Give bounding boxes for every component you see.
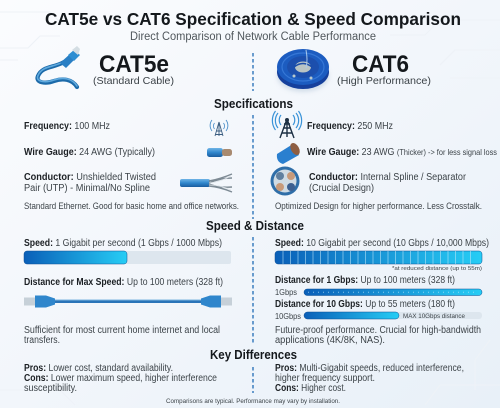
1Gbps bar <box>304 289 482 296</box>
panel: CAT6 speed and distance <box>275 238 489 346</box>
conductor second line: Pair (UTP) - Minimal/No Spline <box>24 183 150 194</box>
reduced distance note: *at reduced distance (up to 55m) <box>392 266 482 272</box>
distance label: Distance for Max Speed: Up to 100 meters (328 ft) <box>24 277 223 288</box>
panel: CAT6 specifications <box>270 111 497 211</box>
cons: Cons: Lower maximum speed, higher interference <box>24 373 217 384</box>
heading: speed and distance: Speed & Distance <box>206 219 304 233</box>
center divider <box>252 53 254 393</box>
panel: CAT6 pros and cons <box>275 363 464 394</box>
CAT5e heading: CAT5e <box>99 51 169 78</box>
title: CAT5e vs CAT6 Specification & Speed Comparison <box>45 9 461 29</box>
CAT5e summary: Standard Ethernet. Good for basic home and office networks. <box>24 201 239 211</box>
pros second line: higher frequency support. <box>275 373 375 384</box>
max distance label: MAX 10Gbps distance <box>403 313 465 320</box>
panel: CAT5e speed and distance <box>24 238 232 346</box>
1Gbps bar label: 1Gbps <box>275 287 297 297</box>
segmented speed bar <box>275 251 482 264</box>
heading: specifications: Specifications <box>214 96 293 111</box>
frequency: Frequency: 100 MHz <box>24 121 110 132</box>
subtitle: Direct Comparison of Network Cable Performance <box>130 31 376 43</box>
conductor: Conductor: Internal Spline / Separator <box>309 172 467 183</box>
10Gbps bar <box>304 312 482 319</box>
panel: CAT5e specifications <box>24 120 239 211</box>
icon: large antenna <box>272 111 302 138</box>
pros: Pros: Multi-Gigabit speeds, reduced interference, <box>275 363 464 374</box>
10Gbps bar label: 10Gbps <box>275 311 301 321</box>
summary second line: applications (4K/8K, NAS). <box>275 335 385 346</box>
summary second line: transfers. <box>24 335 60 346</box>
wire gauge: Wire Gauge: 24 AWG (Typically) <box>24 147 155 158</box>
panel: CAT5e pros and cons <box>24 363 217 394</box>
distance 10 Gbps label: Distance for 10 Gbps: Up to 55 meters (180 ft) <box>275 299 455 310</box>
icon: twisted pair cable <box>180 174 232 192</box>
panel: CAT6 header <box>277 49 431 92</box>
cons second line: susceptibility. <box>24 383 77 394</box>
icon: cable with two connectors <box>24 296 232 308</box>
CAT6 summary: Optimized Design for higher performance. Less Crosstalk. <box>275 201 482 211</box>
CAT5e speed summary: Sufficient for most current home internet and local <box>24 325 220 336</box>
cons: Cons: Higher cost. <box>275 383 346 394</box>
pros: Pros: Lower cost, standard availability. <box>24 363 173 374</box>
icon: spline cross-section <box>270 166 300 196</box>
CAT6 heading: CAT6 <box>352 51 409 78</box>
speed label: Speed: 1 Gigabit per second (1 Gbps / 1000 Mbps) <box>24 238 222 249</box>
icon: CAT5e patch cable <box>37 46 80 87</box>
heading: key differences: Key Differences <box>210 348 297 362</box>
icon: CAT6 cable spool <box>277 49 329 92</box>
CAT5e subheading: (Standard Cable) <box>93 75 174 87</box>
icon: thick wire <box>277 141 302 164</box>
CAT6 subheading: (High Performance) <box>337 75 431 87</box>
frequency: Frequency: 250 MHz <box>307 121 393 132</box>
conductor second line: (Crucial Design) <box>309 183 374 194</box>
icon: small antenna <box>210 120 228 136</box>
speed bar <box>24 251 231 264</box>
distance 1 Gbps label: Distance for 1 Gbps: Up to 100 meters (328 ft) <box>275 275 455 286</box>
panel: CAT5e header <box>37 46 174 87</box>
conductor: Conductor: Unshielded Twisted <box>24 172 156 183</box>
footer note: Comparisons are typical. Performance may vary by installation. <box>166 398 340 405</box>
icon: wire <box>207 148 232 157</box>
